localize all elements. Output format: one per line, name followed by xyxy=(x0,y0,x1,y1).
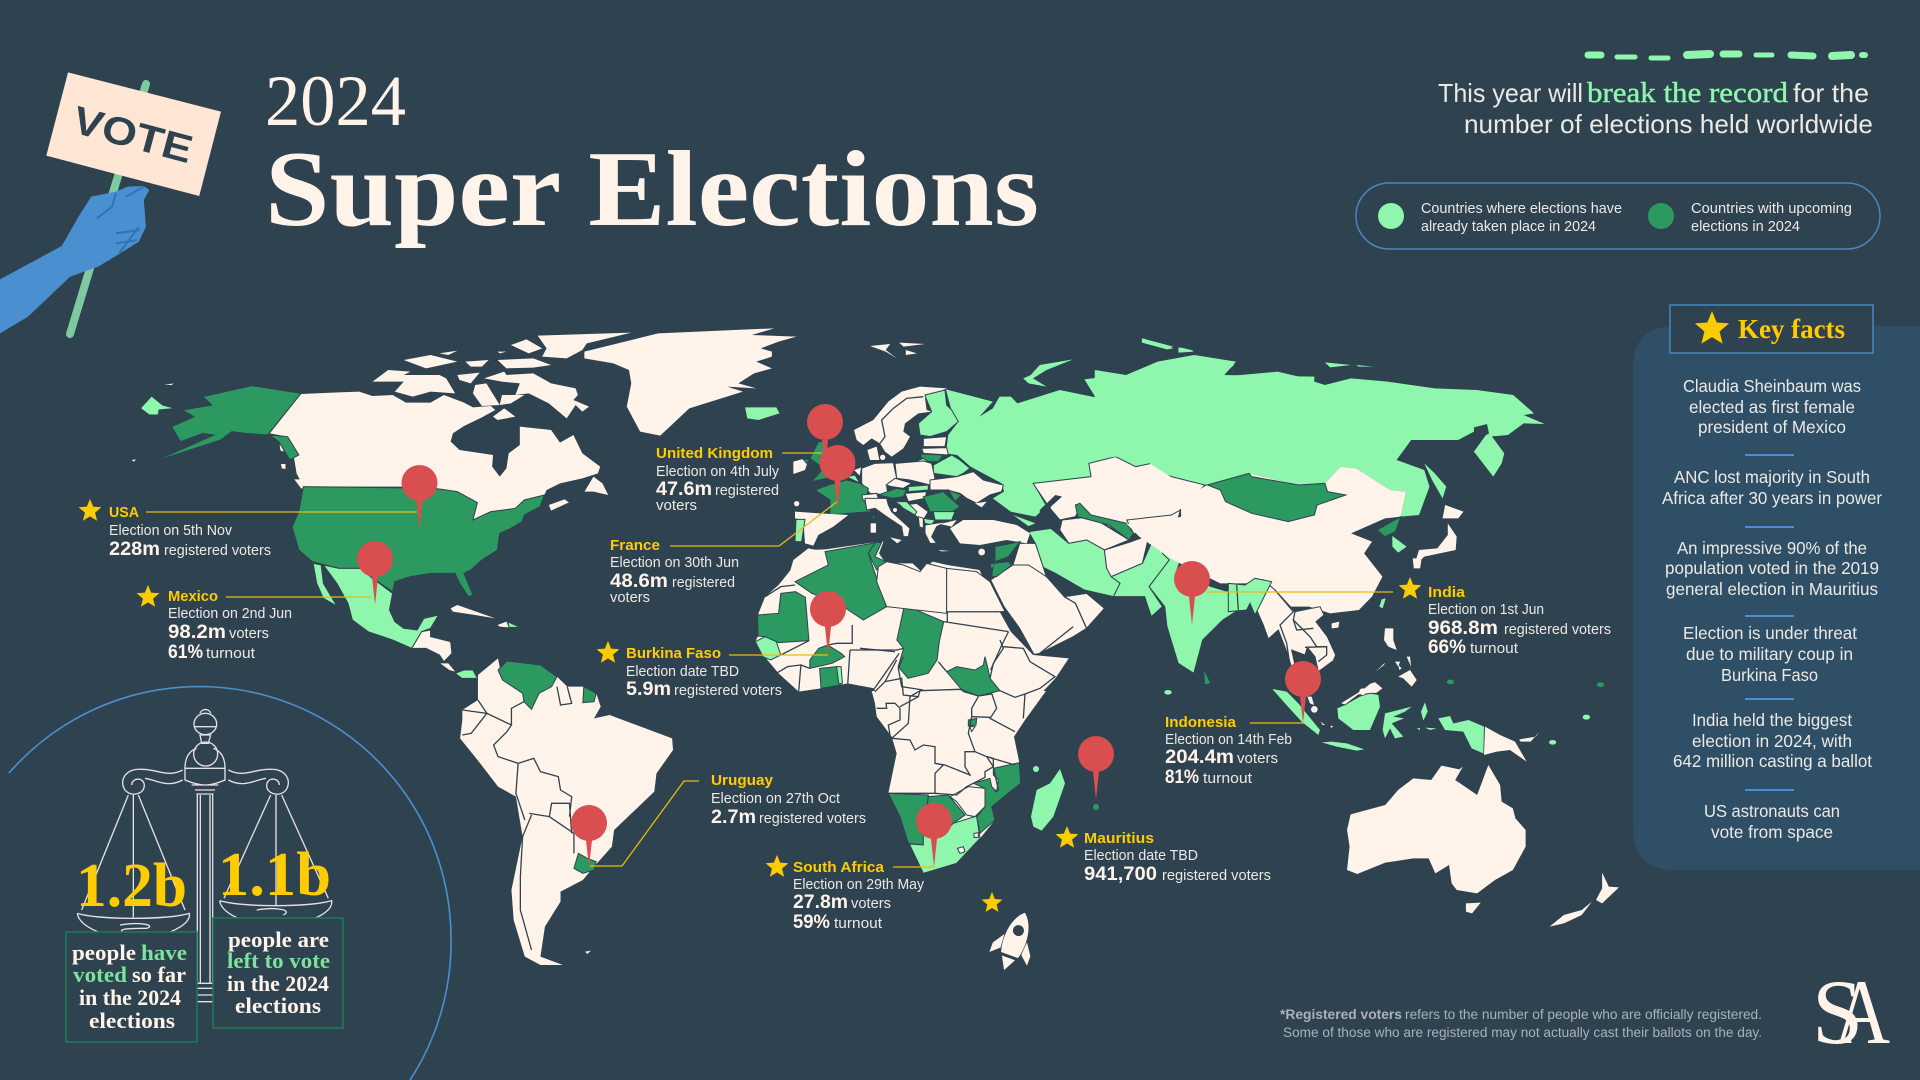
panel: key facts: elected as first female xyxy=(1689,397,1855,417)
stat box: left to vote: left to vote xyxy=(227,948,330,973)
label: Mexico: voters xyxy=(229,625,269,642)
label: India: Election on 1st Jun xyxy=(1428,601,1544,618)
label: United Kingdom: voters xyxy=(656,497,697,514)
stat: 1.1b: 1.1b xyxy=(218,841,331,909)
label: Uruguay xyxy=(711,772,866,828)
panel: key facts: Burkina Faso xyxy=(1721,665,1818,685)
headline: break the record: for the xyxy=(1793,78,1869,108)
label: India: 66% xyxy=(1428,637,1466,658)
label: United Kingdom: registered xyxy=(715,482,779,499)
legend: already taken place in 2024 xyxy=(1421,219,1596,235)
stat box: left to vote: elections xyxy=(235,993,321,1018)
panel: key facts: due to military coup in xyxy=(1686,644,1853,664)
decorative dashed record line xyxy=(1588,54,1865,58)
stat box: left to vote: in the 2024 xyxy=(227,971,329,996)
label: USA xyxy=(79,499,271,560)
logo: SA: A xyxy=(1834,961,1890,1063)
title xyxy=(265,61,1039,249)
legend: Countries with upcoming xyxy=(1691,201,1852,217)
label: USA: Election on 5th Nov xyxy=(109,522,232,539)
map: Greenland, Russia, West Asia and North Africa xyxy=(584,328,1314,720)
label: Indonesia: 204.4m xyxy=(1165,747,1234,768)
footnote xyxy=(1280,1007,1762,1040)
label: France xyxy=(610,537,739,606)
label: Mexico: Mexico xyxy=(168,588,218,605)
label: South Africa: Election on 29th May xyxy=(793,876,924,893)
label: France: registered xyxy=(672,574,735,591)
logo: SA: S xyxy=(1812,961,1863,1063)
label: South Africa: 27.8m xyxy=(793,892,848,913)
label: France: 48.6m xyxy=(610,571,668,592)
label: Mexico: 61% xyxy=(168,642,203,663)
label: Mauritius: 941,700 xyxy=(1084,864,1157,885)
label: Indonesia: turnout xyxy=(1203,770,1253,787)
leader lines xyxy=(146,453,1393,867)
panel: key facts: Election is under threat xyxy=(1683,623,1857,643)
label: Indonesia: 81% xyxy=(1165,767,1199,788)
label: Mexico xyxy=(137,585,292,663)
label: Mauritius xyxy=(1056,826,1271,885)
panel: key facts: India held the biggest xyxy=(1692,710,1852,730)
label: India: 968.8m xyxy=(1428,618,1498,639)
panel: key facts: US astronauts can xyxy=(1704,801,1840,821)
label: Uruguay: Uruguay xyxy=(711,772,774,789)
label: Mauritius: Mauritius xyxy=(1084,830,1154,847)
icon: rocket and star xyxy=(982,892,1044,977)
label: South Africa: turnout xyxy=(834,915,883,932)
stat box: have voted: so far xyxy=(132,962,186,987)
label: Burkina Faso: 5.9m xyxy=(626,679,671,700)
stat box: have voted: elections xyxy=(89,1008,175,1033)
label: South Africa xyxy=(766,855,924,933)
label: India: registered voters xyxy=(1504,621,1611,638)
logo: SA xyxy=(1812,961,1890,1063)
map: Central and southern Africa xyxy=(860,640,1065,873)
map: South America xyxy=(460,658,673,965)
footnote: Some of those who are registered may not actually cast their ballots on the day. xyxy=(1283,1025,1762,1040)
map: North America xyxy=(131,333,631,678)
label: India: turnout xyxy=(1470,640,1519,657)
stat: 1.2b: 1.2b xyxy=(76,852,187,920)
label: India: India xyxy=(1428,584,1466,601)
title: 2024 xyxy=(265,61,406,141)
panel: key facts: Africa after 30 years in power xyxy=(1662,488,1882,508)
map: East Asia xyxy=(1095,338,1604,719)
headline: break the record xyxy=(1438,78,1873,139)
panel: key facts: vote from space xyxy=(1711,822,1833,842)
panel: key facts: Claudia Sheinbaum was xyxy=(1683,376,1861,396)
legend: elections in 2024 xyxy=(1691,219,1800,235)
label: France: voters xyxy=(610,589,650,606)
label: India xyxy=(1399,577,1611,658)
map: Australia and Pacific xyxy=(1347,715,1619,927)
chart: voting scales xyxy=(9,687,451,1080)
panel: key facts: Key facts xyxy=(1738,314,1845,344)
label: Burkina Faso: Election date TBD xyxy=(626,663,739,680)
label: Mexico: 98.2m xyxy=(168,622,226,643)
icon: hand holding vote sign xyxy=(0,72,221,334)
icon: balance scale xyxy=(77,710,332,1002)
world map xyxy=(131,328,1619,965)
label: United Kingdom: United Kingdom xyxy=(656,445,773,462)
label: France: France xyxy=(610,537,660,554)
title: Super Elections xyxy=(265,130,1039,249)
panel: key facts: ANC lost majority in South xyxy=(1674,467,1870,487)
label: USA: USA xyxy=(109,504,139,521)
panel: key facts: 642 million casting a ballot xyxy=(1673,751,1872,771)
headline: break the record: number of elections held worldwide xyxy=(1464,109,1873,139)
headline: break the record: break the record xyxy=(1587,78,1788,109)
map: Europe and Mediterranean xyxy=(780,387,1037,620)
label: USA: registered voters xyxy=(164,542,271,559)
stat box: left to vote xyxy=(213,918,343,1028)
label: United Kingdom: Election on 4th July xyxy=(656,463,779,480)
label: Indonesia: Election on 14th Feb xyxy=(1165,731,1292,748)
label: United Kingdom xyxy=(656,445,779,514)
label: France: Election on 30th Jun xyxy=(610,554,739,571)
panel: key facts: president of Mexico xyxy=(1698,417,1846,437)
headline: break the record: This year will xyxy=(1438,78,1583,108)
label: Indonesia: Indonesia xyxy=(1165,714,1237,731)
legend xyxy=(1356,183,1880,249)
stat box: left to vote: people are xyxy=(228,927,329,952)
label: USA: 228m xyxy=(109,539,160,560)
panel: key facts xyxy=(1633,305,1920,870)
label: Burkina Faso xyxy=(597,641,782,700)
label: South Africa: 59% xyxy=(793,912,830,933)
stat box: have voted: have xyxy=(141,940,187,965)
footnote: refers to the number of people who are officially registered. xyxy=(1405,1007,1762,1022)
panel: key facts: election in 2024, with xyxy=(1692,731,1852,751)
label: Indonesia xyxy=(1165,714,1292,788)
map: Southeast Asia and Indonesia xyxy=(1228,578,1530,762)
label: Mexico: turnout xyxy=(206,645,256,662)
label: Uruguay: registered voters xyxy=(759,810,866,827)
label: Burkina Faso: Burkina Faso xyxy=(626,645,721,662)
label: Uruguay: 2.7m xyxy=(711,807,756,828)
label: South Africa: voters xyxy=(851,895,891,912)
legend: Countries where elections have xyxy=(1421,201,1622,217)
map pins xyxy=(357,404,1321,867)
label: Mauritius: registered voters xyxy=(1162,867,1271,884)
footnote: *Registered voters xyxy=(1280,1007,1402,1022)
label: Mexico: Election on 2nd Jun xyxy=(168,605,292,622)
label: United Kingdom: 47.6m xyxy=(656,479,712,500)
panel: key facts: population voted in the 2019 xyxy=(1665,558,1879,578)
label: Mauritius: Election date TBD xyxy=(1084,847,1198,864)
stat box: have voted xyxy=(66,932,197,1042)
label: Indonesia: voters xyxy=(1237,750,1278,767)
panel: key facts: general election in Mauritius xyxy=(1666,579,1878,599)
panel: key facts: An impressive 90% of the xyxy=(1677,538,1867,558)
stat box: have voted: people xyxy=(72,940,136,965)
label: South Africa: South Africa xyxy=(793,859,885,876)
label: Uruguay: Election on 27th Oct xyxy=(711,790,841,807)
label: Burkina Faso: registered voters xyxy=(674,682,782,699)
icon: hand holding vote sign: VOTE xyxy=(68,99,197,172)
stat box: have voted: in the 2024 xyxy=(79,985,181,1010)
stat box: have voted: voted xyxy=(73,962,127,987)
